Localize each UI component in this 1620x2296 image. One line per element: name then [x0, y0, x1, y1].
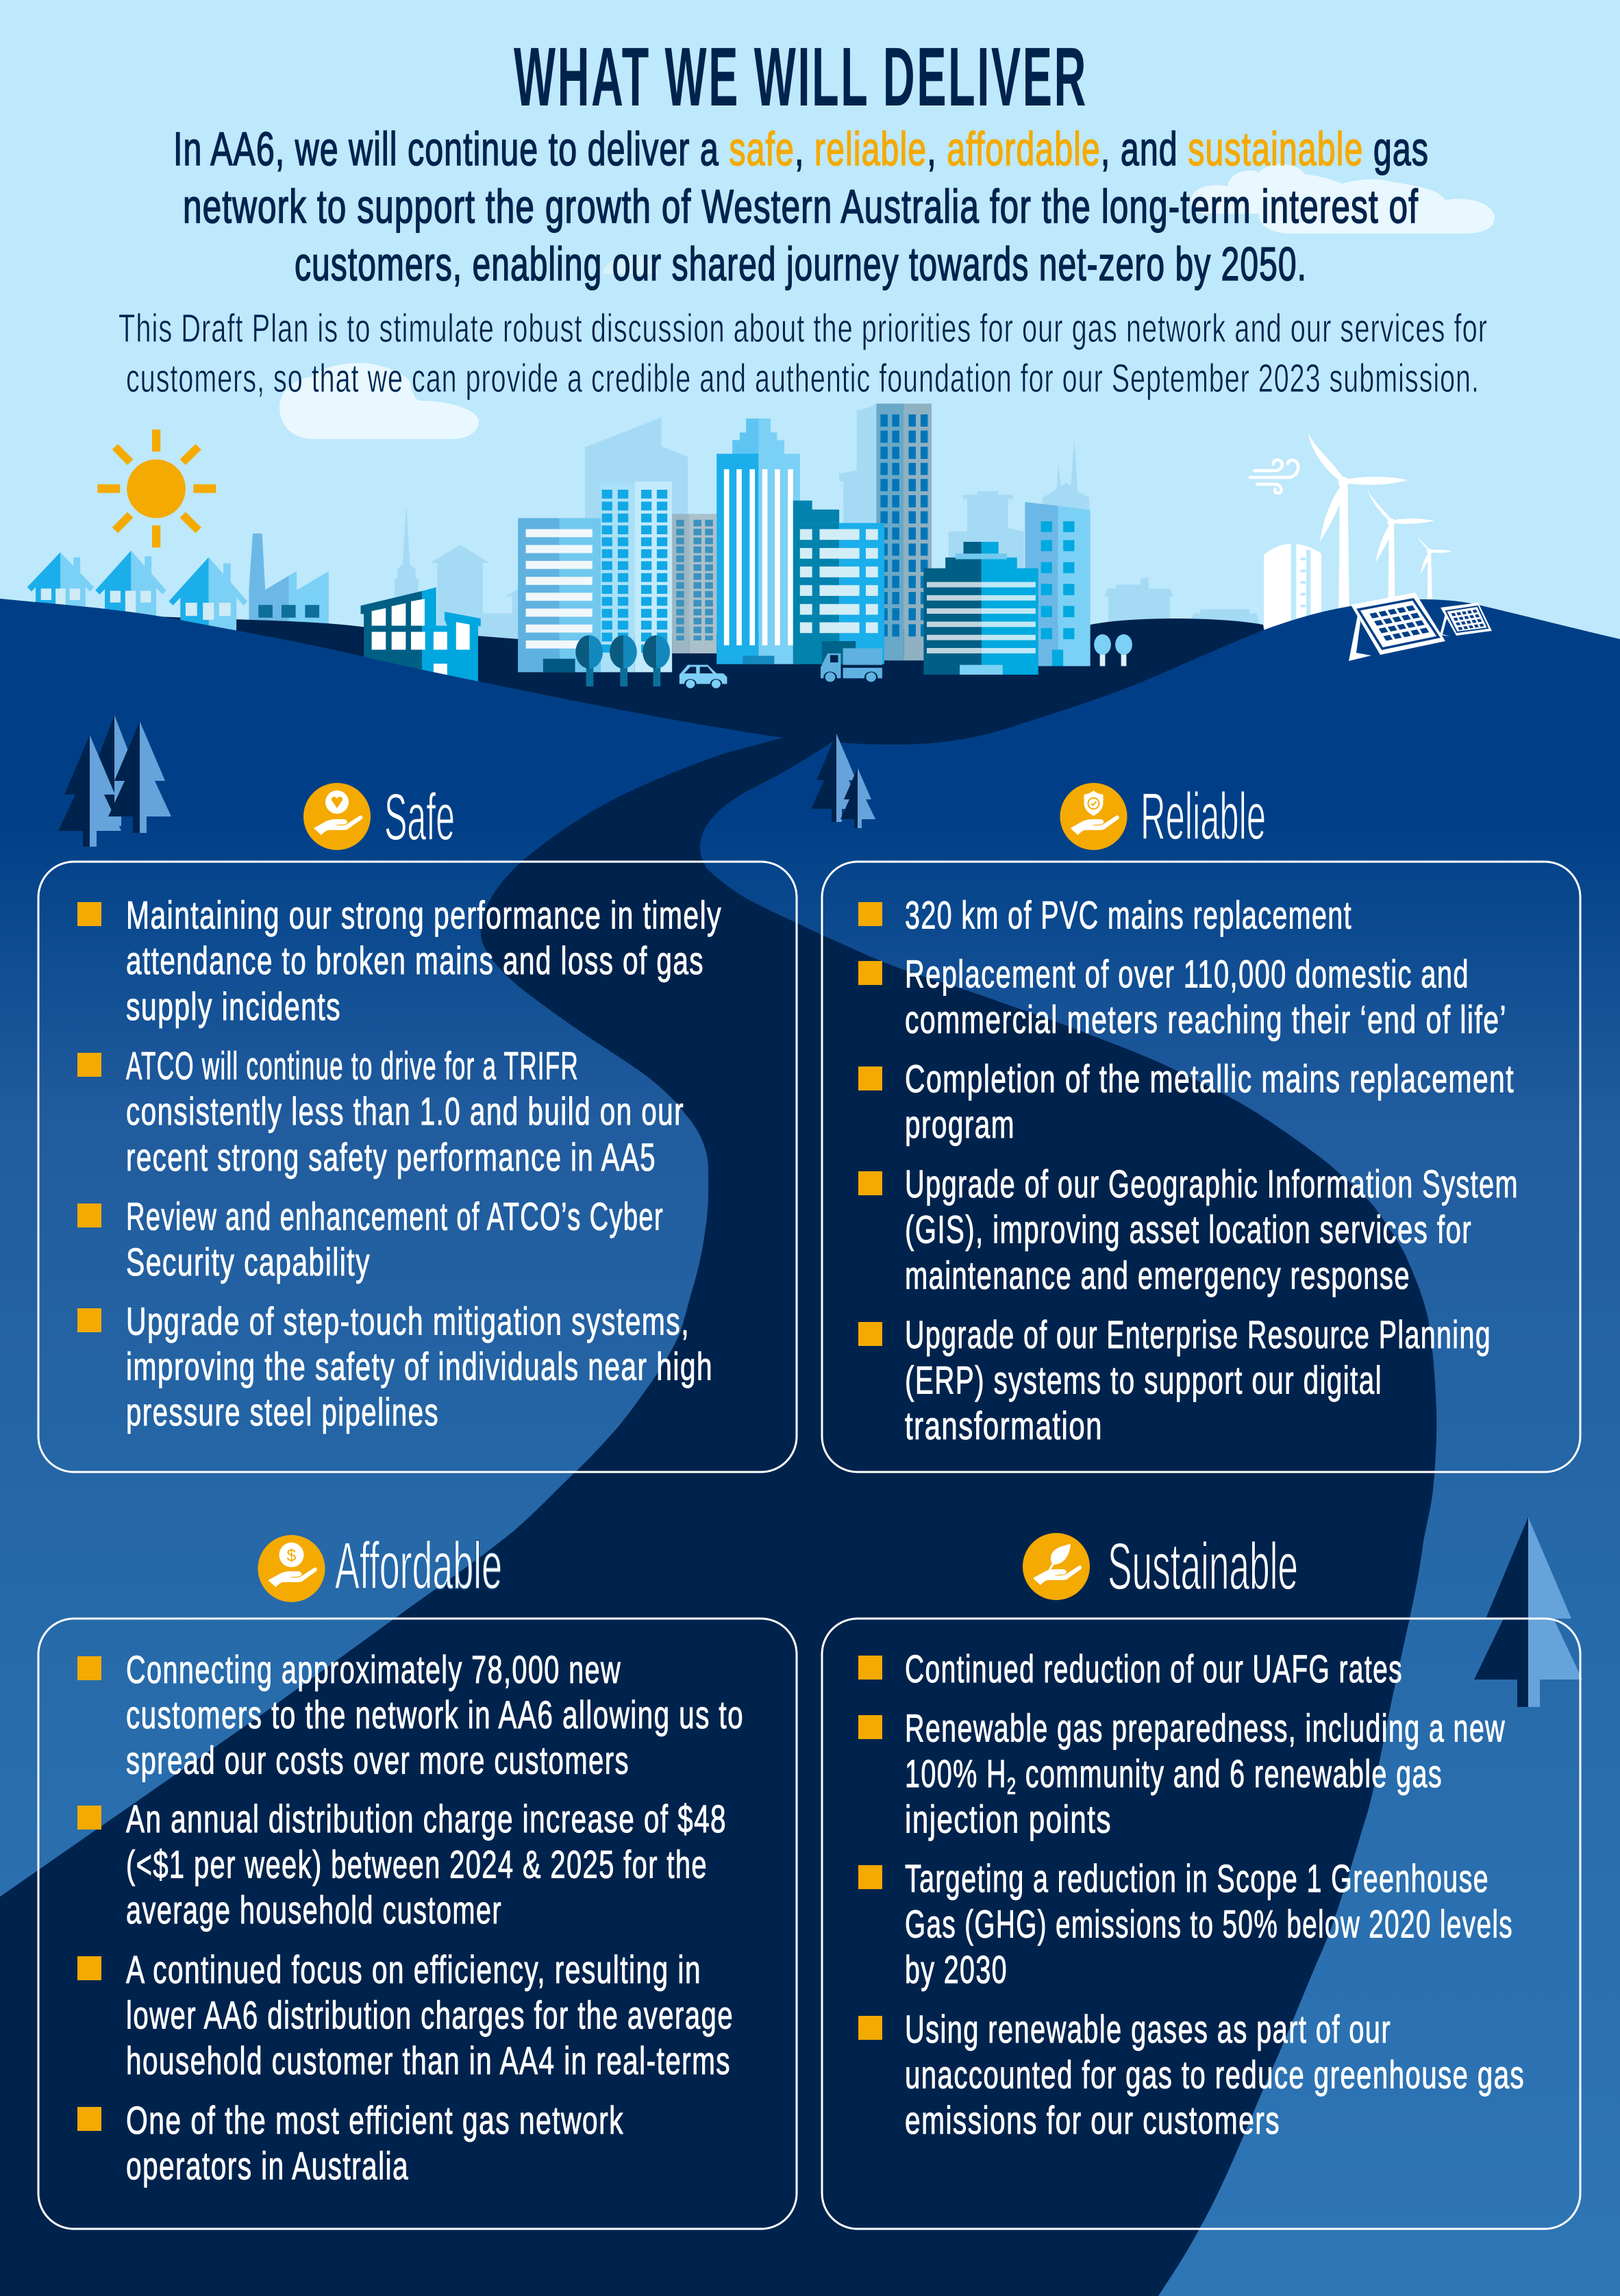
title: WHAT WE WILL DELIVER: [514, 30, 1088, 123]
cloud: upper right: [1191, 164, 1495, 234]
houses: [27, 534, 329, 626]
icon: wind: [1250, 460, 1298, 493]
bullet: renewable gas: [858, 1707, 1506, 1841]
heading: Reliable: [1060, 779, 1266, 853]
bullet: cyber security: Security capability: [126, 1240, 371, 1284]
cloud: behind lead text: [603, 255, 658, 274]
solar panels: [1349, 592, 1492, 661]
bullet: UAFG: Continued reduction of our UAFG rates: [905, 1647, 1403, 1691]
heading: Sustainable: Sustainable: [1108, 1529, 1298, 1604]
bullet: efficient operators: operators in Australia: [126, 2144, 409, 2188]
turbine large: [1308, 432, 1408, 616]
intro text: [119, 306, 1488, 401]
dark back hill: [158, 616, 1288, 767]
heading: Safe: [303, 779, 455, 854]
bullet: step-touch: pressure steel pipelines: [126, 1390, 439, 1434]
bullet: TRIFR: ATCO will continue to drive for a TRIFR: [126, 1044, 579, 1088]
turbine small: [1417, 534, 1452, 603]
bullet: GIS: [858, 1162, 1519, 1297]
panel: Sustainable: [822, 1619, 1580, 2229]
cloud: left: [279, 363, 479, 439]
blue foreground hills: [0, 599, 1620, 2296]
bullet: efficiency: household customer than in AA4 in real-terms: [126, 2039, 731, 2083]
bullet: scope 1: [858, 1857, 1513, 1992]
icon: affordable hand with dollar: [258, 1535, 325, 1602]
heading: Sustainable: [1023, 1529, 1298, 1604]
heading: Affordable: [258, 1528, 502, 1603]
bullet: TRIFR: recent strong safety performance in AA5: [126, 1136, 656, 1180]
heading: Safe: Safe: [384, 779, 455, 854]
bullet: metallic mains: [858, 1058, 1515, 1147]
bullet: TRIFR: [77, 1044, 684, 1180]
bullet: distribution charge: An annual distribution charge increase of $48: [126, 1797, 727, 1841]
bullet: new customers: spread our costs over more customers: [126, 1738, 630, 1782]
bullet: new customers: [77, 1648, 744, 1782]
bullet: renewable gas: 100% H: [905, 1752, 1052, 1796]
panel: Affordable: [38, 1619, 797, 2229]
wind turbines: [1308, 432, 1452, 616]
house 3: [169, 558, 247, 631]
turbine medium: [1367, 489, 1434, 603]
bullet: renewable gas: 2: [1007, 1773, 1017, 1799]
bullet: new customers: customers to the network in AA6 allowing us to: [126, 1693, 744, 1737]
bullet: ERP: (ERP) systems to support our digital: [905, 1359, 1382, 1403]
building: striped: [518, 518, 601, 672]
bullet: step-touch: [77, 1300, 713, 1434]
building: low teal: [361, 587, 481, 687]
bullet: distribution charge: [77, 1797, 727, 1932]
bullet: efficient operators: One of the most efficient gas network: [126, 2099, 624, 2143]
bullet: TRIFR: consistently less than 1.0 and build on our: [126, 1090, 684, 1134]
house 2: [95, 551, 166, 623]
bullet: ERP: transformation: [905, 1404, 1103, 1448]
building: striped block: [923, 542, 1038, 675]
bullet: strong performance: [77, 893, 722, 1029]
bullet: renewable gas: injection points: [905, 1797, 1112, 1841]
bullet: UAG: emissions for our customers: [905, 2099, 1280, 2143]
pale background city left: [395, 417, 688, 643]
bullet: distribution charge: (<$1 per week) between 2024 & 2025 for the: [126, 1843, 708, 1886]
bullet: UAG: Using renewable gases as part of our: [905, 2008, 1391, 2051]
bullet: cyber security: [77, 1195, 664, 1284]
icon: safe hand with heart: [303, 783, 371, 850]
panel small: [1440, 603, 1492, 636]
house 1: [27, 552, 94, 616]
icon: car: [680, 665, 727, 688]
trees: on road: [811, 734, 875, 828]
bullet: efficiency: A continued focus on efficiency, resulting in: [126, 1948, 701, 1992]
bullet: strong performance: attendance to broken mains and loss of gas: [126, 939, 704, 983]
pale background city right: [839, 403, 1260, 626]
icon: affordable hand with dollar: $: [287, 1546, 297, 1565]
panel large: [1349, 592, 1445, 661]
bullet: strong performance: supply incidents: [126, 985, 341, 1029]
building: grey: [672, 514, 716, 653]
bullet: ERP: [858, 1313, 1491, 1448]
bullet: meters: [858, 952, 1507, 1042]
bullet: PVC mains: [858, 893, 1352, 937]
bullet: PVC mains: 320 km of PVC mains replacement: [905, 893, 1352, 937]
sun: [97, 429, 216, 547]
city buildings right: [793, 403, 1452, 682]
factory: [249, 534, 329, 626]
building: teal windows: [793, 501, 884, 664]
bullet: scope 1: by 2030: [905, 1948, 1008, 1992]
city buildings left: [361, 419, 800, 688]
bullet: cyber security: Review and enhancement of ATCO’s Cyber: [126, 1195, 664, 1238]
bullet: efficiency: lower AA6 distribution charges for the average: [126, 1993, 734, 2037]
bullet: step-touch: Upgrade of step-touch mitigation systems,: [126, 1300, 690, 1344]
lead text: In AA6, we will continue to deliver a safe, reliable, affordable, and sustainable gas: [173, 123, 1429, 175]
bullet: renewable gas: community and 6 renewable gas: [1017, 1752, 1443, 1796]
icon: truck: [821, 648, 882, 682]
bullet: new customers: Connecting approximately 78,000 new: [126, 1648, 621, 1692]
heading: Reliable: Reliable: [1141, 779, 1266, 853]
bullet: efficient operators: [77, 2099, 624, 2188]
building: window grid: [601, 482, 672, 672]
trees: light pair: [1094, 634, 1132, 666]
bullet: efficiency: [77, 1948, 734, 2083]
trees: street: [575, 635, 670, 686]
icon: reliable hand with shield: [1060, 783, 1127, 850]
lead text: [173, 123, 1429, 290]
bullet: UAFG: [858, 1647, 1403, 1691]
storage tank: [1264, 544, 1321, 637]
heading: Affordable: Affordable: [335, 1528, 502, 1603]
building: right of tower: [1025, 502, 1091, 666]
icon: sustainable hand with leaf: [1023, 1533, 1090, 1600]
bullet: distribution charge: average household customer: [126, 1888, 502, 1932]
bullet: step-touch: improving the safety of individuals near high: [126, 1345, 713, 1389]
building: tall grey: [876, 403, 932, 660]
building: tower: [716, 419, 800, 664]
bullet: UAG: [858, 2008, 1525, 2143]
bullet: metallic mains: program: [905, 1103, 1015, 1147]
tree: lower right: [1474, 1517, 1582, 1707]
panel: Safe: [38, 862, 797, 1472]
winding road: [0, 738, 1436, 2296]
bullet: GIS: maintenance and emergency response: [905, 1253, 1410, 1297]
trees: upper left: [58, 715, 171, 847]
panel: Reliable: [822, 862, 1580, 1472]
bullet: strong performance: Maintaining our strong performance in timely: [126, 893, 722, 937]
